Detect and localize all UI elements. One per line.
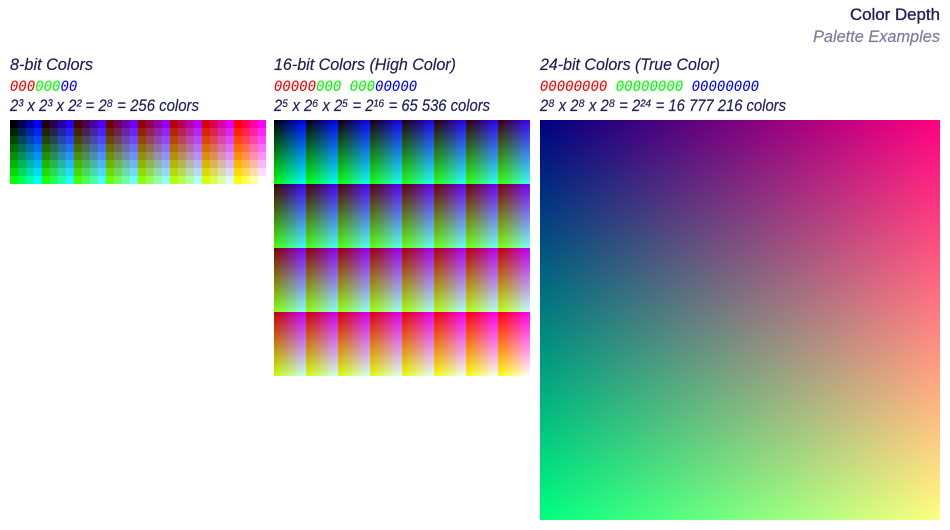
palette: 16-bit tiled gradients (274, 120, 530, 376)
equation: 16 777 216 colors: 2⁸ x 2⁸ x 2⁸ = 2²⁴ = 16 777 216 colors (539, 96, 786, 115)
heading: 16-bit Colors (High Color): 16-bit Colors (High Color) (274, 55, 456, 74)
panel: 24-bit colors (539, 55, 940, 520)
palette: 8-bit swatch grid (10, 120, 266, 184)
panel: 8-bit colors (9, 55, 266, 184)
equation: 256 colors: 2³ x 2³ x 2² = 2⁸ = 256 colors (9, 96, 199, 115)
heading: 24-bit Colors (True Color): 24-bit Colors (True Color) (539, 55, 720, 74)
heading: 8-bit Colors: 8-bit Colors (10, 55, 93, 74)
palette: 24-bit gradient square (540, 120, 940, 520)
title: Color Depth: Palette Examples (813, 27, 940, 46)
title: Color Depth (813, 5, 940, 46)
binary layout: 24-bit: 00000000 00000000 00000000 (540, 79, 759, 95)
title: Color Depth: Color Depth (850, 5, 940, 24)
panel: 16-bit colors (273, 55, 530, 376)
equation: 65 536 colors: 2⁵ x 2⁶ x 2⁵ = 2¹⁶ = 65 536 colors (273, 96, 490, 115)
binary layout: 8-bit: 00000000 (10, 79, 77, 95)
binary layout: 16-bit: 00000000 00000000 (274, 79, 417, 95)
